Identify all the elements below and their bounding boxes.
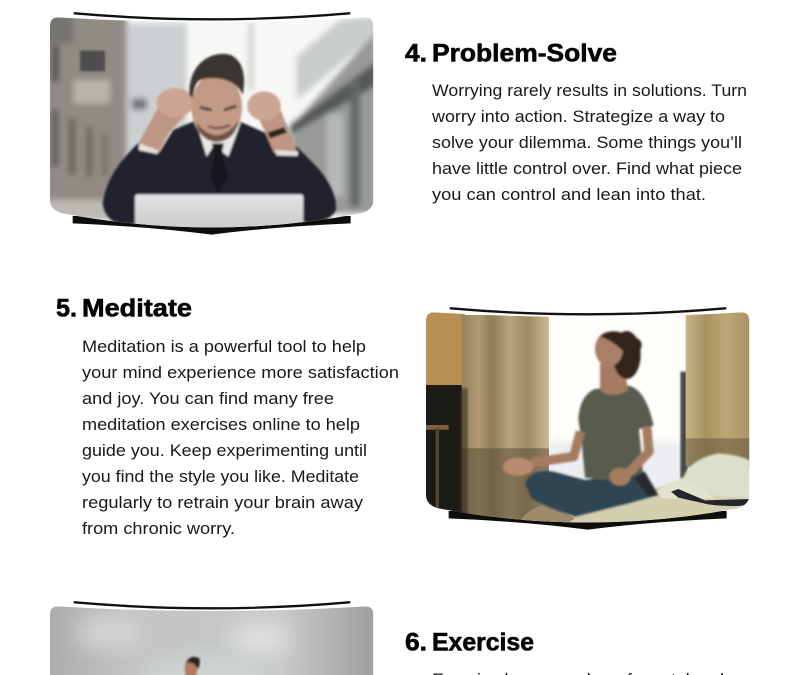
text block: meditate body: Meditation is a powerful tool to help bbox=[82, 337, 366, 356]
bed bbox=[526, 480, 750, 522]
photo: stressed man at laptop bbox=[50, 12, 374, 235]
heading: 5. Meditate: Meditate bbox=[82, 294, 192, 322]
top arc bbox=[451, 308, 725, 314]
bottom band bbox=[73, 216, 351, 235]
text block: meditate body: guide you. Keep experimenting until bbox=[82, 441, 367, 460]
text block: meditate body: and joy. You can find many free bbox=[82, 389, 334, 408]
text block: problem-solve body: worry into action. Strategize a way to bbox=[431, 107, 725, 126]
text block: meditate body bbox=[82, 337, 399, 538]
photo: exercise, person against cloudy sky bbox=[50, 601, 374, 675]
text block: problem-solve body bbox=[431, 81, 747, 204]
heading: 4. Problem-Solve: Problem-Solve bbox=[432, 40, 617, 68]
heading: 5. Meditate: 5. bbox=[56, 294, 77, 322]
heading: 6. Exercise: Exercise bbox=[432, 628, 534, 656]
text block: meditate body: regularly to retrain your brain away bbox=[82, 493, 364, 512]
text block: problem-solve body: you can control and lean into that. bbox=[432, 185, 706, 204]
heading: 6. Exercise: 6. bbox=[405, 628, 427, 656]
text block: problem-solve body: have little control over. Find what piece bbox=[432, 159, 742, 178]
text block: problem-solve body: solve your dilemma. Some things you’ll bbox=[432, 133, 742, 152]
bottom band bbox=[449, 511, 727, 530]
text block: meditate body: your mind experience more satisfaction bbox=[82, 363, 399, 382]
woman bbox=[503, 331, 658, 517]
text block: problem-solve body: Worrying rarely results in solutions. Turn bbox=[432, 81, 747, 100]
text block: meditate body: meditation exercises online to help bbox=[82, 415, 360, 434]
head bbox=[185, 657, 200, 675]
photo: woman meditating on bed bbox=[426, 307, 750, 530]
text block: meditate body: you find the style you like. Meditate bbox=[82, 467, 359, 486]
text block: meditate body: from chronic worry. bbox=[82, 519, 235, 538]
top arc bbox=[75, 13, 349, 19]
man bbox=[103, 54, 336, 230]
top arc bbox=[75, 602, 349, 608]
heading: 4. Problem-Solve: 4. bbox=[405, 40, 427, 68]
